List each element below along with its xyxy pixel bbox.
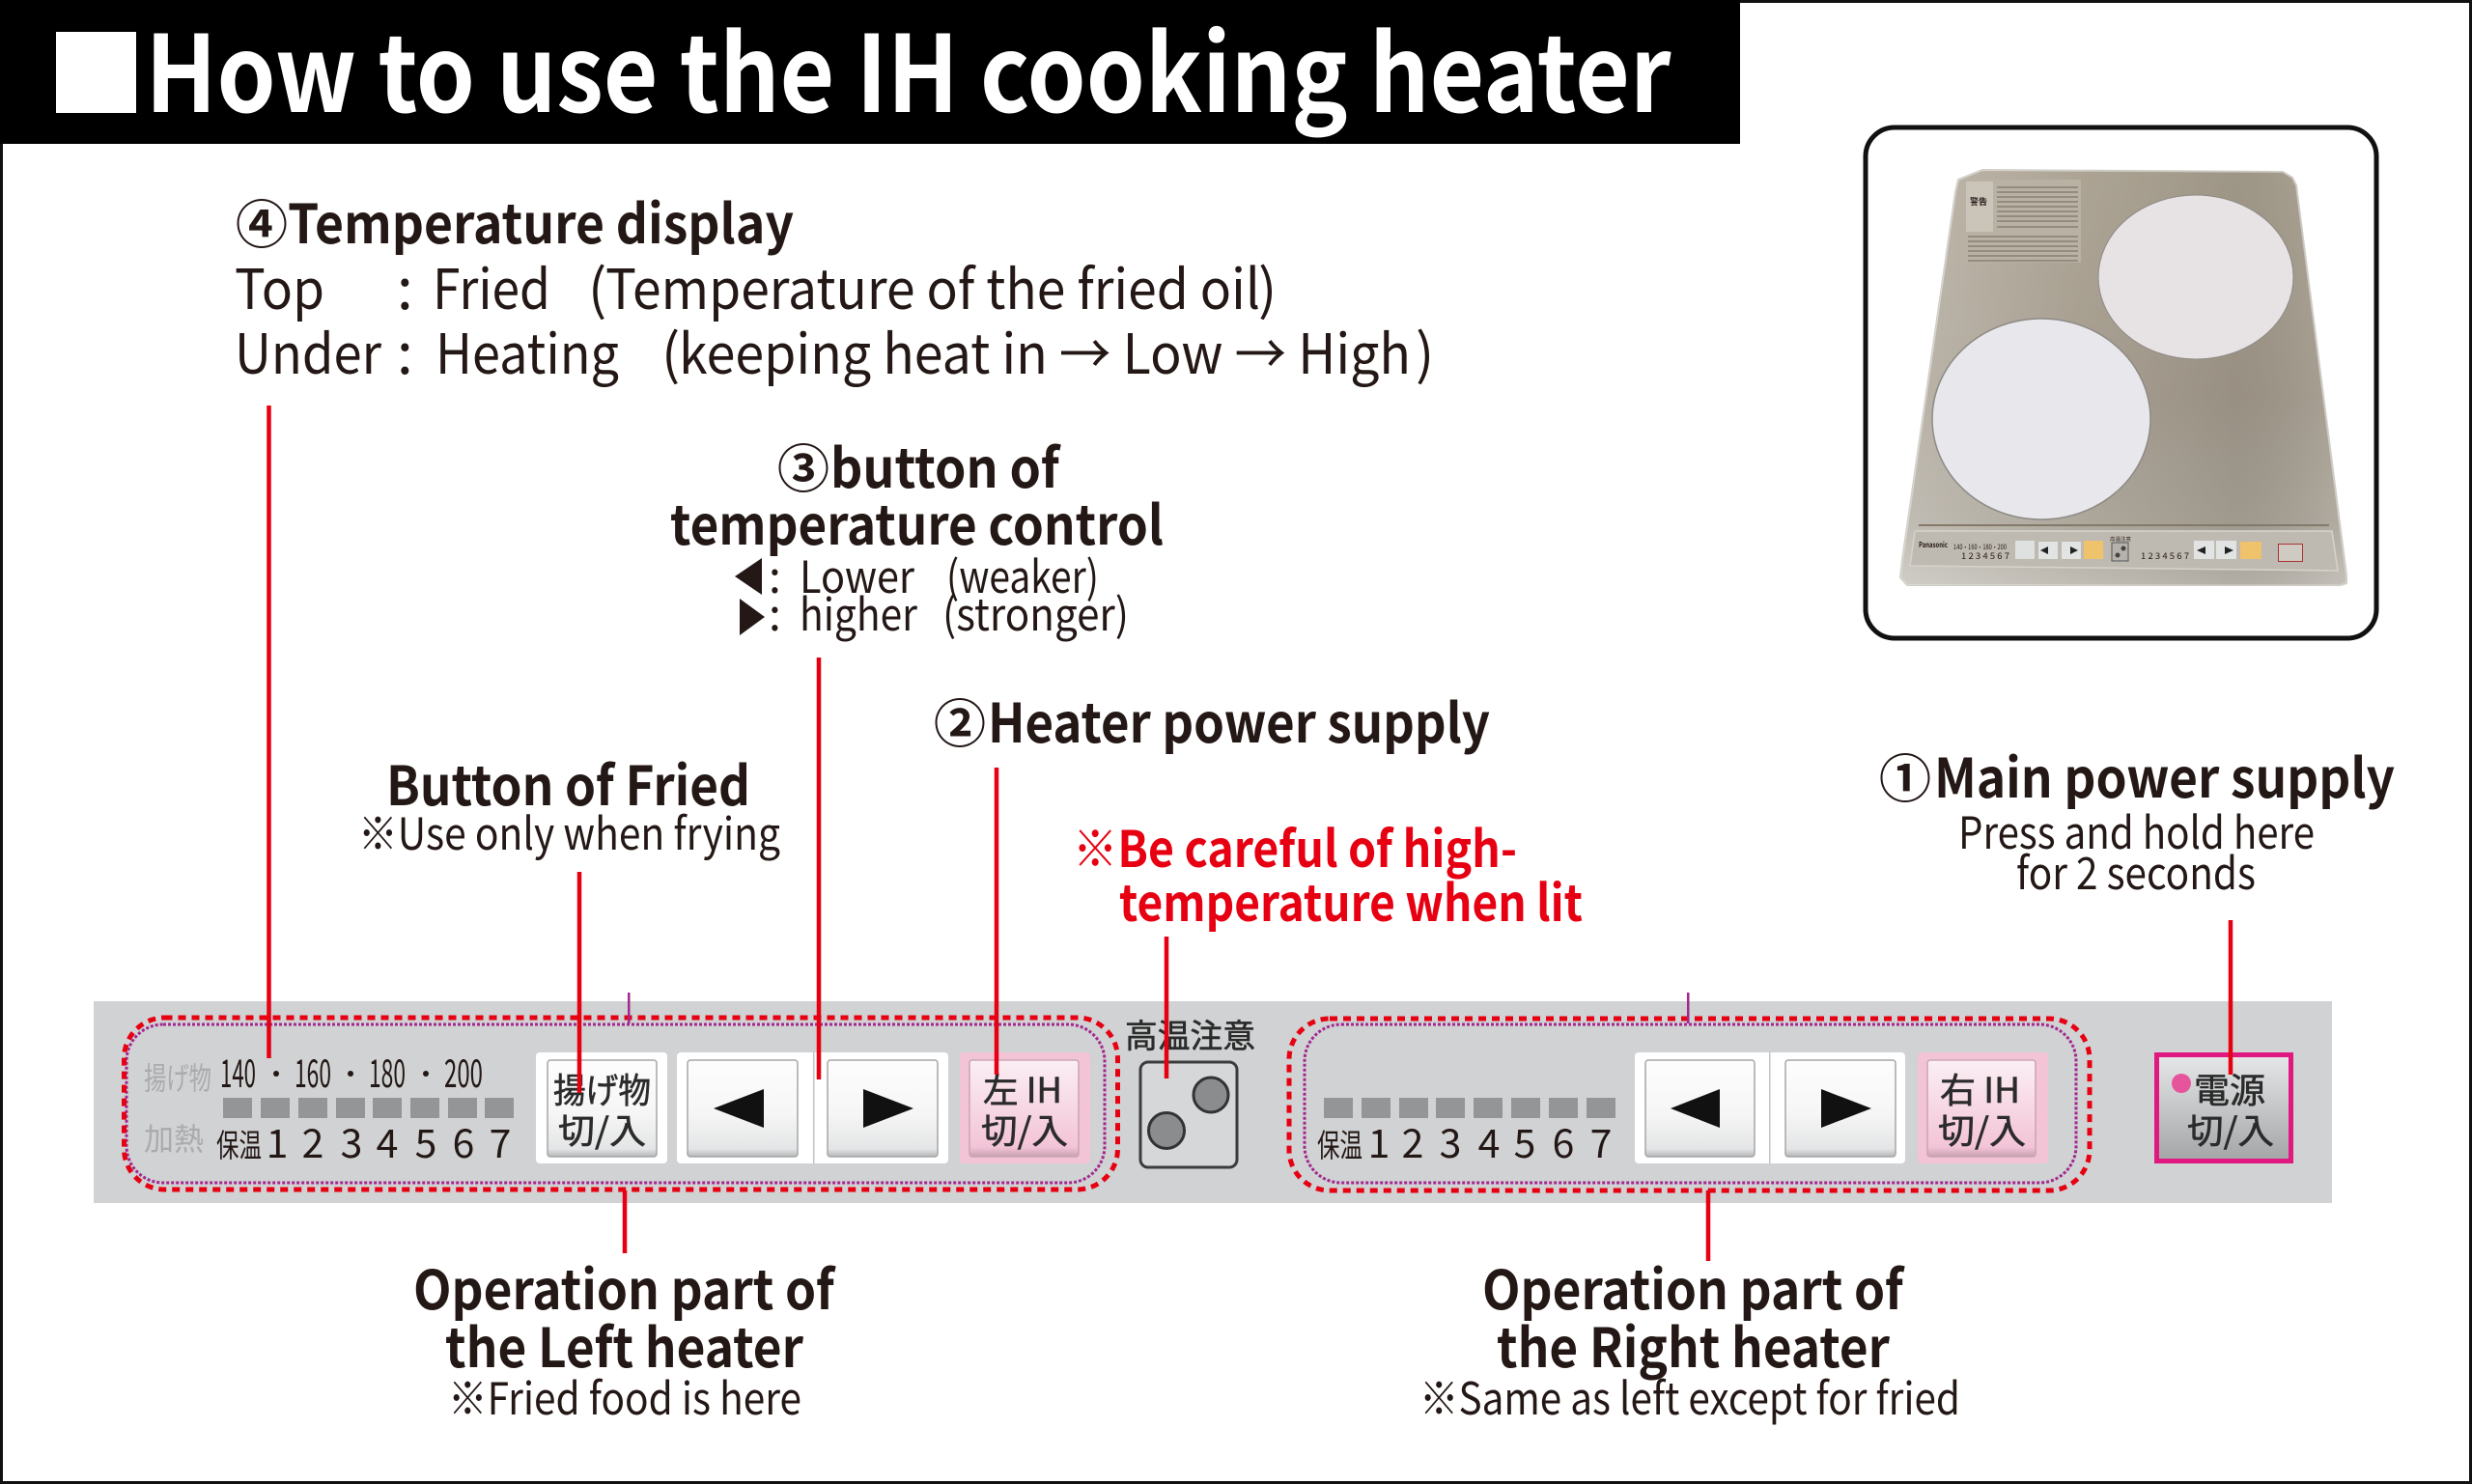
button: fried on/off [536, 1052, 667, 1163]
front control strip: 140・160・180・200 [1953, 543, 2007, 552]
warning label: 警告 [1970, 195, 1987, 208]
panel: temperature control button explanation: higher [800, 580, 917, 644]
right heater temperature display: 3 [1440, 1111, 1461, 1169]
panel: temperature display explanation: ( [588, 246, 606, 325]
burner top right [2098, 195, 2293, 359]
panel: temperature display explanation: : [397, 242, 413, 326]
stove plate [1900, 170, 2346, 585]
left heater temperature display: 6 [453, 1111, 474, 1169]
button: left heater on/off: 左 IH [983, 1063, 1062, 1113]
panel: temperature control button explanation: (stronger) [942, 580, 1129, 644]
panel: button of fried explanation: ※Use only when frying [358, 799, 780, 863]
right heater temperature display: 2 [1402, 1111, 1423, 1169]
right heater temperature display: 4 [1478, 1111, 1500, 1169]
leader: heater power [995, 768, 998, 1075]
left heater temperature display: 5 [415, 1111, 436, 1169]
panel: temperature display explanation: ) [1416, 311, 1434, 390]
leader: right heater caption [1706, 1190, 1710, 1261]
icon: left triangle [735, 558, 762, 595]
panel: right heater caption: ※Same as left except for fried [1419, 1364, 1960, 1428]
panel: temperature control button explanation: Lower [800, 543, 914, 606]
left heater temperature display: 2 [302, 1111, 323, 1169]
panel: temperature display explanation [235, 182, 1434, 391]
panel: temperature control button explanation: : [769, 543, 781, 606]
front control strip [1910, 525, 2338, 571]
callout: high temperature warning: ※Be careful of high- [1073, 809, 1517, 882]
panel: temperature control button explanation: temperature control [670, 483, 1164, 561]
button: right heater on/off [1918, 1052, 2048, 1163]
heading: heater power supply: ② [934, 682, 986, 758]
left heater temperature display: 1 [267, 1111, 288, 1169]
left heater temperature display: 140 [220, 1043, 256, 1099]
panel: left heater caption: Operation part of [413, 1247, 836, 1326]
front control strip: 1 2 3 4 5 6 7 [2141, 549, 2189, 562]
panel: main power supply explanation: Main power supply [1934, 736, 2395, 814]
panel: left heater caption: the Left heater [445, 1305, 804, 1384]
left heater temperature display: 160 [295, 1043, 331, 1099]
button: left heater on/off: 切/入 [981, 1104, 1068, 1154]
panel: main power supply explanation [1879, 736, 2395, 903]
button: left heater on/off [960, 1052, 1090, 1163]
panel: temperature display explanation: Top [235, 246, 324, 325]
left heater temperature display: 保温 [216, 1120, 262, 1166]
right heater temperature display: 1 [1368, 1111, 1390, 1169]
panel: temperature display explanation: ( [661, 311, 680, 390]
panel: main power supply explanation: for 2 seconds [2016, 839, 2256, 903]
panel: right heater caption: the Right heater [1497, 1305, 1891, 1384]
panel: left heater caption [413, 1247, 836, 1428]
left heater temperature display: 180 [369, 1043, 406, 1099]
leader: left heater caption [623, 1190, 627, 1253]
high temperature indicator [1125, 1010, 1255, 1167]
leader: high temperature [1165, 937, 1168, 1078]
right heater temperature display: 5 [1514, 1111, 1535, 1169]
panel: temperature display explanation: ) [1258, 246, 1277, 325]
front control strip: 1 2 3 4 5 6 7 [1961, 549, 2009, 562]
button: right heater on/off: 右 IH [1940, 1063, 2020, 1113]
button: main power: 切/入 [2187, 1104, 2274, 1154]
leader: main power [2229, 920, 2233, 1075]
button: fried on/off: 揚げ物 [553, 1063, 651, 1113]
buttons: left heater arrows [677, 1052, 948, 1163]
panel: temperature control button explanation: button of [830, 426, 1061, 504]
panel: right heater caption: Operation part of [1482, 1247, 1905, 1326]
panel: button of fried explanation [358, 743, 780, 863]
panel: temperature control button explanation [670, 426, 1164, 644]
panel: temperature display explanation: ④ [236, 182, 288, 259]
heading: heater power supply: Heater power supply [988, 681, 1490, 759]
panel: temperature display explanation: Fried [433, 246, 550, 325]
panel: temperature display explanation: Under [235, 311, 382, 390]
callout: high temperature warning [1073, 809, 1583, 936]
outline: left heater operation area [124, 993, 1118, 1190]
warning label [1963, 180, 2081, 263]
front control strip: 高温注意 [2110, 536, 2131, 543]
panel: left heater caption: ※Fried food is here [448, 1364, 801, 1428]
panel: photo of the IH cooktop [1866, 127, 2376, 638]
left heater temperature display: 200 [444, 1043, 483, 1099]
panel: temperature display explanation: Temperature of the fried oil [605, 246, 1260, 325]
front control strip: Panasonic [1919, 540, 1948, 550]
right heater temperature display: 6 [1553, 1111, 1574, 1169]
callout: high temperature warning: temperature when lit [1119, 863, 1583, 936]
panel: temperature display explanation: : [397, 307, 413, 391]
right heater temperature display [1317, 1098, 1615, 1169]
panel: button of fried explanation: Button of Fried [386, 743, 750, 822]
leader: temperature control [817, 658, 821, 1079]
panel: temperature display explanation: Temperature display [288, 182, 794, 260]
panel: main power supply explanation: Press and hold here [1958, 798, 2315, 862]
buttons: right heater arrows [1635, 1052, 1905, 1163]
button: fried on/off: 切/入 [558, 1104, 646, 1154]
high temperature indicator: 高温注意 [1125, 1010, 1255, 1057]
burner bottom left [1932, 319, 2150, 519]
button: main power: 電源 [2194, 1063, 2265, 1113]
panel: temperature display explanation: Heating [435, 311, 619, 390]
panel: main power supply explanation: ① [1879, 737, 1931, 813]
button: right heater on/off: 切/入 [1938, 1104, 2026, 1154]
icon: right triangle [740, 599, 765, 635]
panel: temperature display explanation: keeping heat in → Low → High [679, 311, 1411, 390]
left heater temperature display: 4 [377, 1111, 398, 1169]
leader: temperature display [267, 406, 271, 1058]
left heater temperature display [144, 1043, 514, 1169]
panel: temperature control button explanation: : [769, 580, 781, 644]
leader lines [268, 406, 2231, 1261]
panel: control panel strip [94, 993, 2332, 1203]
panel: right heater caption [1419, 1247, 1960, 1428]
right heater temperature display: 7 [1590, 1111, 1612, 1169]
button: main power [2157, 1054, 2290, 1161]
panel: temperature control button explanation: ③ [777, 427, 829, 503]
left heater temperature display: 加熱 [144, 1115, 204, 1160]
left heater temperature display: 7 [490, 1111, 511, 1169]
right heater temperature display: 保温 [1317, 1120, 1362, 1166]
left heater temperature display: 揚げ物 [144, 1054, 211, 1099]
panel: temperature control button explanation: (weaker) [946, 543, 1099, 606]
left heater temperature display: 3 [341, 1111, 362, 1169]
leader: fried button [577, 872, 581, 1093]
outline: right heater operation area [1289, 993, 2090, 1190]
